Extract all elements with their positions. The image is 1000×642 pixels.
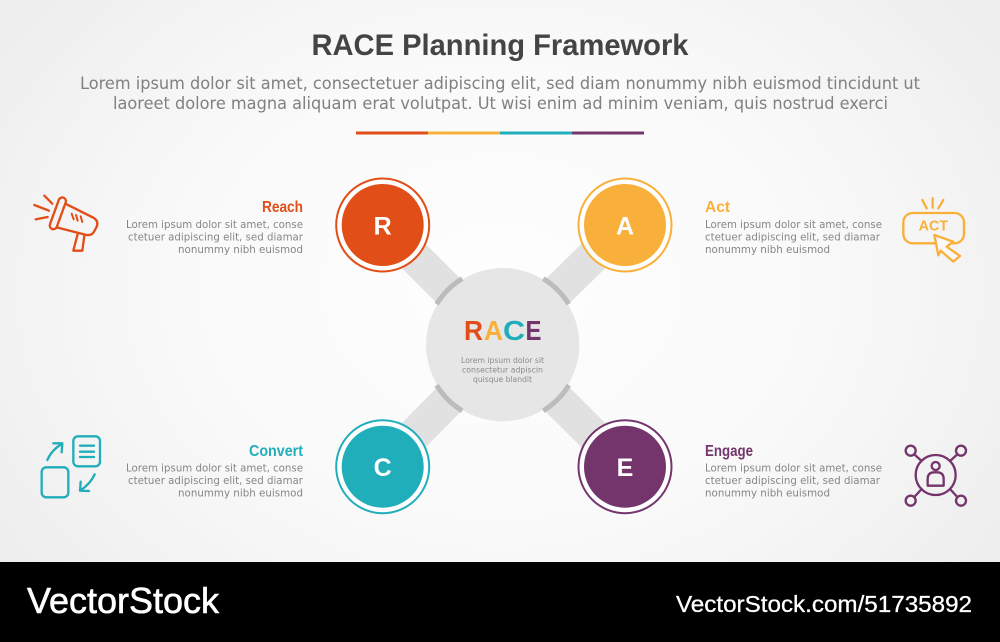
hub text: consectetur adpiscin [462,366,543,374]
node E [578,420,672,513]
title: RACE Planning Framework [312,29,689,62]
footer band [0,562,1000,642]
hub arc accents [437,279,569,411]
text block: Reach: ctetuer adipiscing elit, sed diamar [128,232,304,244]
node A: A [616,212,634,240]
text block: Convert: ctetuer adipiscing elit, sed diamar [128,475,304,487]
text block: Reach [126,199,304,256]
text block: Engage: ctetuer adipiscing elit, sed diamar [705,475,881,487]
footer url: VectorStock.com/51735892 [676,591,972,617]
node C: C [374,454,392,482]
node A [578,178,672,272]
subtitle: Lorem ipsum dolor sit amet, consectetuer adipiscing elit, sed diam nonummy nibh euismod tincidunt ut [80,74,921,93]
text block: Convert [126,443,304,500]
icon: convert documents [42,436,100,497]
text block: Convert: Convert [249,443,303,460]
subtitle [80,74,921,113]
text block: Convert: nonummy nibh euismod [178,488,303,500]
hub text: quisque blandit [473,375,532,384]
hub heading RACE [464,315,542,346]
subtitle: laoreet dolore magna aliquam erat volutpat. Ut wisi enim ad minim veniam, quis nostrud exerci [113,94,888,113]
text block: Engage [705,443,882,500]
hub heading RACE: C [503,315,525,346]
text block: Act: Act [705,199,730,216]
icon: engage network [906,446,966,506]
text block: Act [705,199,882,256]
text block: Engage: Engage [705,443,753,460]
icon: megaphone [34,196,97,251]
node R [336,178,429,272]
text block: Act: Lorem ipsum dolor sit amet, conse [705,219,882,231]
hub text [461,356,544,384]
text block: Reach: Reach [262,199,303,216]
footer logo: VectorStock [27,580,220,621]
node R: R [374,212,392,240]
text block: Act: ctetuer adipiscing elit, sed diamar [705,232,881,244]
hub text: Lorem ipsum dolor sit [461,356,544,365]
central hub [426,268,579,421]
icon: act button with cursor [903,198,964,262]
text block: Convert: Lorem ipsum dolor sit amet, conse [126,462,303,474]
hub heading RACE: A [484,315,503,346]
text block: Engage: Lorem ipsum dolor sit amet, conse [705,462,882,474]
colored divider [356,132,644,134]
connector bars [383,225,625,467]
hub heading RACE: R [464,315,483,346]
text block: Reach: nonummy nibh euismod [178,244,303,256]
node C [336,420,429,513]
hub heading RACE: E [526,315,542,346]
icon: act button with cursor: ACT [919,218,948,234]
text block: Reach: Lorem ipsum dolor sit amet, conse [126,219,303,231]
text block: Act: nonummy nibh euismod [705,244,830,256]
text block: Engage: nonummy nibh euismod [705,488,830,500]
node E: E [617,454,633,482]
